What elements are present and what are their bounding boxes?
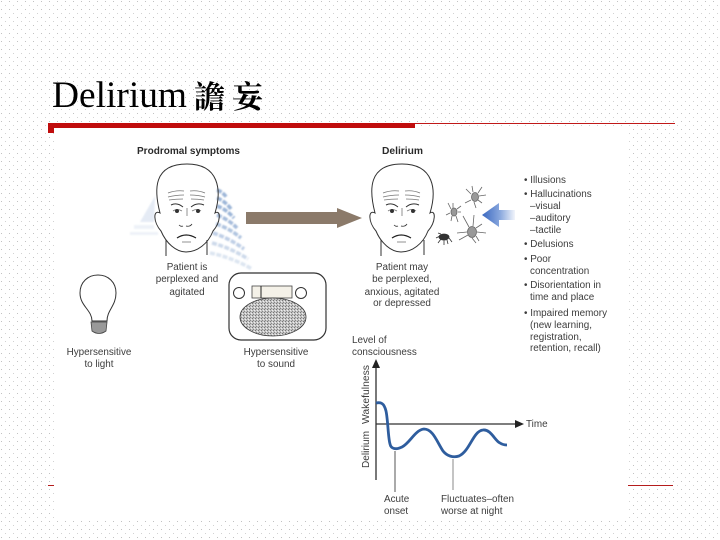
heading: delirium: Delirium <box>382 146 423 157</box>
title: 妄 <box>232 80 265 115</box>
symptom list: • Illusions <box>524 175 566 186</box>
bottom rule <box>48 485 673 486</box>
panel: medical illustration <box>54 128 628 520</box>
arrow: progression <box>246 208 362 228</box>
heading: prodromal symptoms: Prodromal symptoms <box>137 146 241 157</box>
caption: patient may be: be perplexed, <box>372 274 432 285</box>
curve <box>376 403 507 457</box>
caption: patient perplexed: agitated <box>169 287 205 298</box>
top rule <box>48 123 675 133</box>
symptom list <box>524 175 607 354</box>
symptom list: registration, <box>530 332 582 343</box>
symptom list: time and place <box>530 292 595 303</box>
symptom list: (new learning, <box>530 320 592 331</box>
symptom list: –visual <box>530 201 561 212</box>
axis labels: Delirium <box>361 431 372 468</box>
title: Delirium <box>52 75 187 116</box>
axis labels <box>361 365 372 468</box>
caption: hypersensitive to sound: to sound <box>257 359 295 370</box>
symptom list: • Impaired memory <box>524 308 607 319</box>
icon: prodromal head <box>155 164 219 256</box>
caption: patient may be: or depressed <box>373 298 431 309</box>
icon: delirium head <box>370 164 434 256</box>
chart title: consciousness <box>352 347 417 358</box>
symptom list: • Hallucinations <box>524 189 592 200</box>
label: acute onset: Acute <box>384 494 409 505</box>
caption: patient perplexed <box>156 262 218 298</box>
label: fluctuates <box>440 494 514 517</box>
symptom list: • Poor <box>524 254 552 265</box>
title <box>52 75 265 116</box>
label: acute onset: onset <box>384 506 408 517</box>
axes <box>372 359 524 480</box>
icon: radio <box>229 273 326 340</box>
caption: patient may be <box>365 262 439 309</box>
caption: patient perplexed: perplexed and <box>156 274 218 285</box>
caption: hypersensitive to sound: Hypersensitive <box>244 347 309 358</box>
leader: fluctuates <box>452 459 454 490</box>
caption: patient perplexed: Patient is <box>167 262 207 273</box>
leader: acute onset <box>394 451 396 492</box>
chart title: Level of <box>352 335 387 346</box>
caption: patient may be: Patient may <box>376 262 428 273</box>
symptom list: concentration <box>530 266 589 277</box>
caption: hypersensitive to light: to light <box>84 359 114 370</box>
axis labels: Wakefulness <box>361 365 372 424</box>
caption: hypersensitive to light: Hypersensitive <box>67 347 132 358</box>
caption: patient may be: anxious, agitated <box>365 287 439 298</box>
symptom list: –tactile <box>530 225 562 236</box>
icon: light bulb <box>80 275 116 334</box>
label: fluctuates: worse at night <box>440 506 503 517</box>
caption: hypersensitive to light <box>67 347 132 370</box>
arrow: blue hallucination arrow <box>482 203 515 227</box>
chart: level of consciousness <box>352 335 548 517</box>
label: fluctuates: Fluctuates–often <box>441 494 514 505</box>
time label: Time <box>526 419 548 430</box>
symptom list: • Disorientation in <box>524 280 601 291</box>
caption: hypersensitive to sound <box>244 347 309 370</box>
symptom list: retention, recall) <box>530 343 601 354</box>
light and sound waves <box>130 190 320 326</box>
symptom list: • Delusions <box>524 239 574 250</box>
symptom list: –auditory <box>530 213 571 224</box>
icon: spiders <box>436 186 486 245</box>
title: 譫 <box>194 80 225 115</box>
